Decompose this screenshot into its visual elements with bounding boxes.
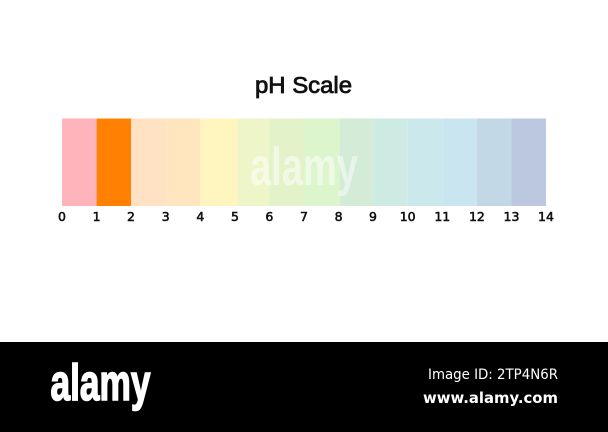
segment 3-4 <box>166 118 200 206</box>
segment 12-13 <box>477 118 512 206</box>
title: pH Scale <box>255 72 352 98</box>
segment 8-9 <box>340 118 373 206</box>
website: www.alamy.com <box>423 389 558 407</box>
footer band <box>0 342 608 432</box>
scale numbers: 8 <box>335 209 343 224</box>
segment 7-8 <box>304 118 340 206</box>
scale numbers <box>58 209 554 224</box>
segment 9-10 <box>373 118 408 206</box>
segment 2-3 <box>131 118 166 206</box>
segment 13-14 <box>512 118 546 206</box>
scale numbers: 1 <box>93 209 101 224</box>
scale numbers: 11 <box>434 209 450 224</box>
watermark: alamy <box>250 137 358 197</box>
scale numbers: 12 <box>469 209 485 224</box>
scale numbers: 7 <box>300 209 308 224</box>
scale numbers: 5 <box>231 209 239 224</box>
image id: Image ID: 2TP4N6R <box>428 367 558 383</box>
scale numbers: 4 <box>196 209 204 224</box>
segment 0-1 <box>62 118 97 206</box>
scale numbers: 0 <box>58 209 66 224</box>
segment 11-12 <box>442 118 477 206</box>
segment 4-5 <box>200 118 238 206</box>
segment 1-2 <box>97 118 131 206</box>
scale numbers: 14 <box>538 209 554 224</box>
scale numbers: 6 <box>265 209 273 224</box>
scale numbers: 13 <box>504 209 519 224</box>
pH colour bar <box>62 118 546 206</box>
footer logo: alamy <box>50 354 151 411</box>
scale numbers: 2 <box>127 209 135 224</box>
segment 10-11 <box>408 118 442 206</box>
scale numbers: 3 <box>162 209 170 224</box>
scale numbers: 9 <box>369 209 377 224</box>
segment 6-7 <box>269 118 304 206</box>
segment 5-6 <box>238 118 270 206</box>
scale numbers: 10 <box>400 209 416 224</box>
